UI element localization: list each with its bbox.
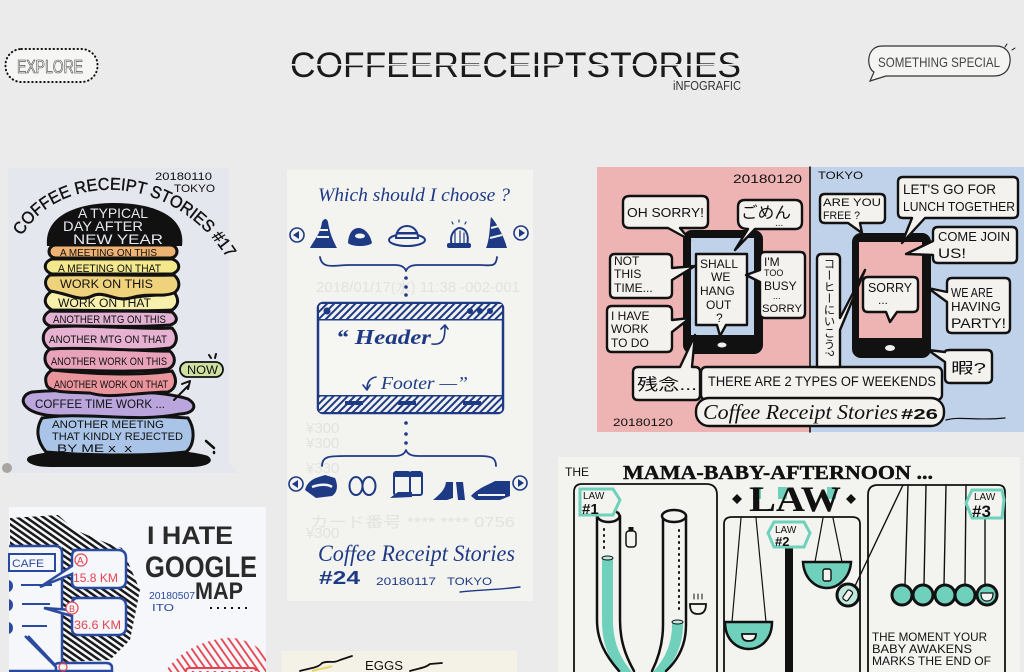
- burger stack: [23, 203, 211, 467]
- dots top: [404, 276, 408, 297]
- heading: i hate: I HATE: [147, 522, 233, 550]
- dots bottom: [404, 421, 408, 445]
- icon: hat round: [348, 228, 372, 246]
- ghost receipt print: ¥300: [305, 420, 339, 437]
- bubble: not this time: TIME...: [614, 281, 653, 295]
- icon: sandals: [350, 477, 376, 495]
- pendulum strings: [855, 485, 985, 586]
- tag: law 1: #1: [582, 501, 599, 518]
- icon: bell cake: [447, 220, 471, 248]
- card: route A: [40, 550, 126, 588]
- footer bar: [318, 395, 503, 412]
- bubble: hima: [928, 350, 992, 383]
- date: 20180117: [376, 576, 436, 588]
- heading: google: GOOGLE: [145, 551, 257, 584]
- panel: mama baby afternoon law: [558, 457, 1020, 672]
- icon: sneakers: [471, 481, 510, 500]
- icon: arrow right: [513, 476, 527, 490]
- panel: law 1: [574, 484, 717, 672]
- subtitle: iNFOGRAFIC: [673, 79, 741, 93]
- panel: which should I choose receipt #24: [287, 170, 533, 601]
- bubble: lets go for lunch: LUNCH TOGETHER: [903, 199, 1015, 214]
- carousel bottom: [289, 472, 527, 500]
- date: TOKYO: [447, 576, 493, 588]
- header label: “ Header: [336, 325, 432, 349]
- squiggles: [300, 656, 442, 671]
- bubble: are you free: FREE ?: [823, 210, 860, 222]
- layer labels: [35, 205, 183, 455]
- caption: MARKS THE END OF: [872, 654, 991, 668]
- caption: BABY AWAKENS: [872, 642, 972, 656]
- layer labels: ANOTHER MEETING: [52, 419, 164, 431]
- heading: the: THE: [565, 465, 589, 479]
- bubble: shall we hang out: HANG: [700, 284, 735, 298]
- icon: ball cup: [981, 593, 993, 601]
- header: [6, 44, 1015, 93]
- layer labels: DAY AFTER: [63, 218, 143, 234]
- date: [155, 171, 215, 195]
- brace top: [320, 257, 497, 271]
- heading: mama baby afternoon: MAMA-BABY-AFTERNOON ...: [623, 462, 933, 484]
- bubble: i have work: TO DO: [611, 336, 649, 350]
- bubble: we are having party: WE ARE: [951, 285, 993, 300]
- date: [376, 576, 520, 592]
- date top: 20180120: [733, 172, 802, 186]
- bubble: too busy: ...: [773, 291, 781, 301]
- bubble: gomen: [735, 200, 802, 250]
- bubble: hima: 暇?: [951, 360, 986, 377]
- panel: two types of weekends #26: [597, 167, 1024, 432]
- layer labels: WORK ON THAT: [58, 298, 151, 310]
- bubble: zannen: 残念...: [637, 376, 697, 394]
- top bun: [47, 203, 182, 246]
- hatching: red area: [165, 638, 266, 672]
- layer labels: ANOTHER WORK ON THAT: [54, 379, 168, 391]
- layer: another work on that: [46, 370, 175, 396]
- bubble: too busy: [746, 252, 805, 318]
- hatching: dark map area: [10, 515, 140, 662]
- bubble: too busy: SORRY: [762, 303, 803, 315]
- button: explore: EXPLORE: [17, 57, 83, 77]
- u tube: [597, 510, 686, 672]
- bubble: gomen: ごめん: [741, 204, 791, 222]
- browser window: [318, 303, 503, 413]
- date: 20180110: [155, 171, 212, 183]
- carousel top: [290, 217, 528, 248]
- sidebar: route list: [9, 546, 62, 671]
- layer: meeting on this: [49, 245, 177, 258]
- signature squiggle: [946, 418, 1005, 420]
- layer labels: THAT KINDLY REJECTED: [52, 431, 183, 443]
- bubble: signature #26: Coffee Receipt Stories: [703, 400, 898, 424]
- bubble: two types of weekends: THERE ARE 2 TYPES OF WEEKENDS: [708, 373, 936, 389]
- icon: swinging bottle: [842, 589, 853, 602]
- date: TOKYO: [174, 183, 215, 195]
- ghost receipt print: カード番号 **** **** 0756: [310, 514, 515, 531]
- tag: law 3: LAW: [974, 492, 996, 503]
- layer: work on that: [45, 291, 178, 311]
- panel: law 3: [837, 485, 1005, 672]
- date: ITO: [152, 603, 174, 614]
- ghost receipt print: [305, 279, 520, 542]
- icon: hat cone: [310, 219, 337, 248]
- bubble: sorry: ...: [878, 293, 888, 307]
- layer: coffee time: [23, 390, 194, 418]
- date: 20180507: [149, 591, 195, 602]
- layer labels: NEW YEAR: [73, 231, 163, 247]
- phone right: [854, 235, 929, 356]
- bubble: zannen: [633, 335, 700, 400]
- bubble: we are having party: [928, 278, 1010, 333]
- bubble: oh sorry: OH SORRY!: [627, 205, 704, 220]
- question: Which should I choose ?: [318, 185, 511, 206]
- icon: hat brim: [389, 226, 425, 246]
- tag: law 1: [580, 489, 620, 518]
- icon: cup: [690, 594, 706, 614]
- callout: now: [174, 354, 223, 453]
- bubble: shall we hang out: OUT: [706, 298, 732, 312]
- tag: law 3: [966, 490, 1004, 521]
- bubble: shall we hang out: WE: [711, 270, 730, 284]
- date: [149, 591, 195, 614]
- tag: law 1: LAW: [583, 491, 605, 502]
- layer labels: ANOTHER MTG ON THIS: [53, 314, 166, 326]
- bubble: come join us: US!: [938, 245, 966, 261]
- location: TOKYO: [818, 170, 864, 182]
- signature: Coffee Receipt Stories: [318, 541, 515, 566]
- dots: [210, 607, 252, 609]
- button: something special: SOMETHING SPECIAL: [878, 54, 1000, 70]
- date bottom: 20180120: [613, 417, 673, 429]
- heading: map: MAP: [195, 578, 243, 605]
- icon: arrow right: [514, 226, 528, 240]
- phone left: [685, 232, 761, 352]
- header bar: [318, 304, 503, 320]
- curved heading: COFFEE RECEIPT STORIES #17: [14, 178, 237, 255]
- bubble: gomen: ...: [775, 218, 783, 229]
- card: route B: B: [69, 604, 75, 614]
- tag: law 2: LAW: [775, 525, 797, 536]
- brace bottom: [322, 450, 496, 466]
- layer labels: A MEETING ON THAT: [58, 263, 161, 275]
- bubble: two types of weekends: [701, 367, 942, 400]
- bubble: are you free: [820, 194, 885, 233]
- callout: now: NOW: [187, 363, 219, 377]
- layer labels: ANOTHER WORK ON THIS: [51, 356, 167, 368]
- panel: i hate google map: [9, 507, 266, 672]
- bubble: too busy: TOO: [764, 268, 783, 278]
- icon: hat pointed: [486, 217, 507, 248]
- sidebar: route list: CAFE: [12, 558, 44, 570]
- icon: heels: [433, 482, 465, 500]
- bubble: oh sorry: [623, 196, 708, 240]
- layer labels: ANOTHER MTG ON THAT: [49, 334, 167, 346]
- bubble: i have work: I HAVE: [611, 309, 649, 323]
- layer labels: A MEETING ON THIS: [60, 248, 157, 259]
- icon: bottle: [626, 527, 636, 547]
- bubble: lets go for lunch: LET'S GO FOR: [903, 181, 996, 197]
- layer: rejected meeting: [38, 415, 193, 455]
- bubble: signature #26: #26: [901, 406, 938, 423]
- bubble: we are having party: PARTY!: [951, 315, 1006, 331]
- bubble: are you free: ARE YOU: [823, 197, 881, 209]
- heading: law: LAW: [749, 479, 841, 519]
- bubble: vertical japanese: コーヒーにいこう?: [822, 258, 834, 356]
- layer labels: A TYPICAL: [78, 205, 148, 221]
- bubble: not this time: THIS: [614, 267, 641, 281]
- title: COFFEERECEIPTSTORIES: [290, 46, 741, 85]
- card: route C: [25, 636, 112, 671]
- bubble: shall we hang out: ?: [716, 311, 723, 325]
- layer: another mtg on that: [43, 326, 176, 350]
- left pan: [725, 518, 772, 649]
- ghost receipt print: ¥330: [305, 460, 339, 477]
- panel: burger receipt #17: [2, 171, 237, 473]
- button: explore: [6, 49, 98, 82]
- bubble: sorry: SORRY: [868, 280, 912, 295]
- right pan: [803, 518, 851, 588]
- tag: law 3: #3: [972, 502, 991, 521]
- card: route A: 15.8 KM: [73, 571, 118, 585]
- balance post: [785, 548, 793, 672]
- tag: law 2: [768, 522, 810, 549]
- issue number: #24: [319, 568, 360, 588]
- bubble: not this time: NOT: [614, 254, 640, 268]
- button: something special: [869, 44, 1015, 81]
- bubble: shall we hang out: SHALL: [700, 257, 738, 271]
- card: red route: [186, 668, 256, 671]
- bubble: not this time: [610, 254, 695, 298]
- bubble: too busy: I'M: [764, 255, 780, 269]
- card: route B: [44, 598, 126, 635]
- layer: another work on this: [45, 348, 174, 371]
- panel: law 2: [724, 517, 860, 672]
- icon: arrow left: [289, 477, 303, 491]
- caption: [872, 630, 991, 668]
- bubble: vertical japanese: [817, 254, 865, 367]
- footer label: Footer —”: [380, 373, 468, 393]
- layer labels: WORK ON THIS: [60, 279, 153, 291]
- ghost receipt print: ¥300: [305, 435, 339, 452]
- bubble: sorry: [863, 277, 918, 322]
- card: route B: 36.6 KM: [74, 618, 121, 632]
- icon: stone corner: [2, 463, 12, 473]
- ghost receipt print: ¥300: [305, 525, 339, 542]
- heading: law: [732, 479, 856, 519]
- bubble: come join us: COME JOIN: [938, 229, 1010, 244]
- bubble: signature #26: [696, 398, 944, 426]
- icon: arrow left: [290, 228, 304, 242]
- bubble: i have work: [607, 306, 690, 352]
- layer labels: COFFEE TIME WORK ...: [35, 399, 165, 411]
- bubble: shall we hang out: [696, 254, 747, 336]
- tag: law 2: #2: [775, 534, 789, 549]
- panel: eggs receipt: [281, 651, 517, 672]
- bubble: i have work: WORK: [611, 322, 648, 336]
- plate: [27, 448, 211, 467]
- bubble: lets go for lunch: [898, 177, 1018, 243]
- layer: work on this: [46, 275, 179, 299]
- bubble: come join us: [906, 227, 1017, 263]
- layer: meeting on that: [45, 259, 179, 274]
- ghost receipt print: 2018/01/17(水) 11:38 -002-001: [316, 279, 520, 296]
- layer labels: BY ME x_x: [57, 443, 133, 455]
- caption: THE MOMENT YOUR: [872, 630, 987, 644]
- bubble: we are having party: HAVING: [951, 299, 1001, 314]
- bubble: too busy: BUSY: [764, 279, 797, 293]
- layer: another mtg on this: [44, 311, 176, 326]
- icon: shoes: [305, 475, 337, 498]
- icon: boots: [390, 472, 422, 498]
- card: route A: A: [77, 556, 84, 567]
- pendulum balls: [837, 584, 997, 606]
